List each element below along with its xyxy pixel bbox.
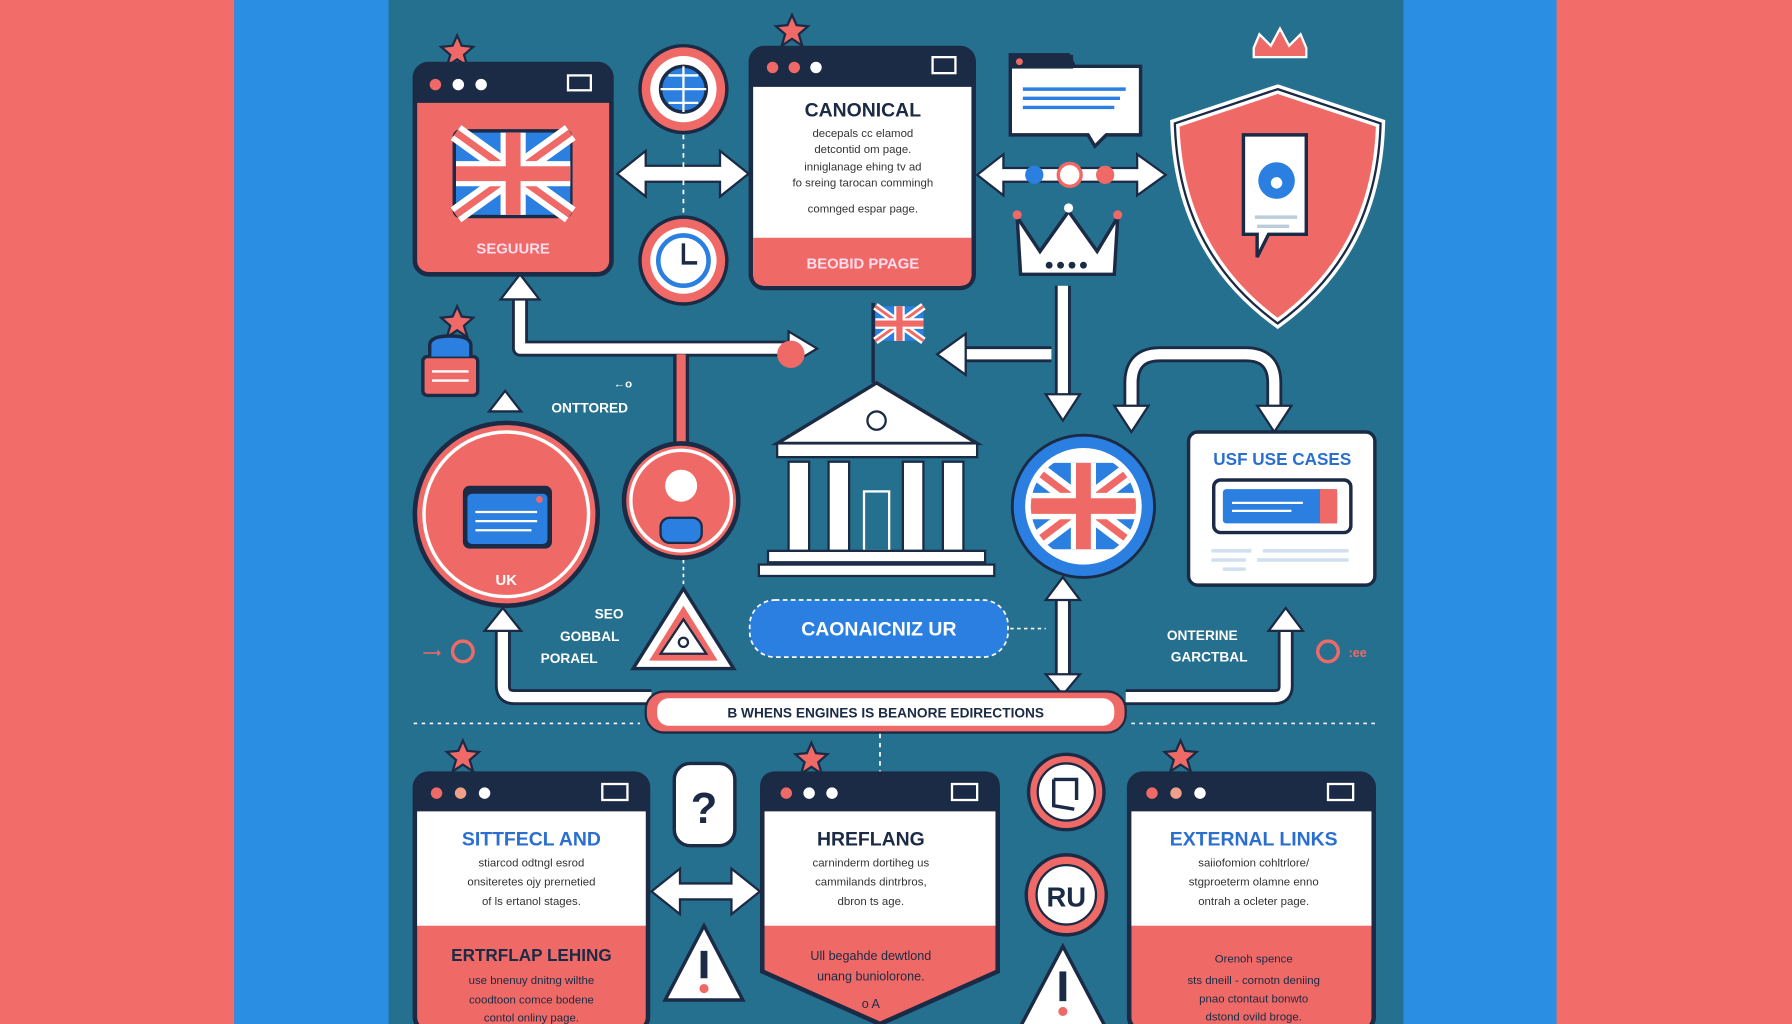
bottom window 3 external links: ontrah a ocleter page. <box>1198 896 1309 908</box>
window: canonical: BEOBID PPAGE <box>806 257 919 273</box>
window: seguure: SEGUURE <box>476 242 550 258</box>
bottom window 1: SITTFECL AND <box>462 829 601 851</box>
bottom window 2 hreflang: cammilands dintrbros, <box>815 877 927 889</box>
flag on pole <box>873 303 923 383</box>
window: canonical: CANONICAL <box>805 100 921 122</box>
side markers: ⟶ <box>423 646 442 660</box>
bottom window 3 external links: pnao ctontaut bonwto <box>1199 993 1308 1005</box>
circle person <box>624 443 738 558</box>
label: onttored: ONTTORED <box>551 401 628 416</box>
bottom window 3 external links: stgproeterm olamne enno <box>1189 877 1319 889</box>
warning bottom right <box>1019 946 1106 1024</box>
bottom window 1 <box>415 741 648 1024</box>
question box: ? <box>691 785 717 833</box>
window: canonical: inniglanage ehing tv ad <box>804 161 922 173</box>
circle icon RU <box>1026 855 1106 935</box>
window: canonical: comnged espar page. <box>808 204 918 216</box>
card USF use cases: USF USE CASES <box>1213 449 1351 469</box>
bottom window 1: of ls ertanol stages. <box>482 896 581 908</box>
bottom window 2 hreflang: carninderm dortiheg us <box>813 857 929 869</box>
bottom window 1: ERTRFLAP LEHING <box>451 945 612 965</box>
bottom window 3 external links: EXTERNAL LINKS <box>1170 829 1338 851</box>
icon: globe <box>640 46 727 133</box>
bottom window 2 hreflang: Ull begahde dewtlond <box>810 949 931 963</box>
bottom window 2 hreflang: o A <box>862 997 881 1011</box>
bottom window 3 external links: Orenoh spence <box>1215 953 1293 965</box>
bottom window 1: use bnenuy dnitng wilthe <box>469 975 594 987</box>
circle blue UK <box>1013 435 1154 577</box>
question box <box>674 763 735 846</box>
double arrows <box>617 151 1166 914</box>
side text: SEO <box>595 606 624 621</box>
warning triangle mid <box>633 589 734 669</box>
window: canonical: decepals cc elamod <box>812 128 913 140</box>
bottom window 3 external links: sts dneill - cornotn deniing <box>1187 975 1320 987</box>
text: ←o <box>614 378 632 390</box>
bottom window 2 hreflang: HREFLANG <box>817 829 925 851</box>
bottom window 1: stiarcod odtngl esrod <box>478 857 584 869</box>
building <box>759 383 994 576</box>
bottom window 3 external links <box>1129 741 1374 1024</box>
banner <box>646 691 1126 733</box>
bottom window 3 external links: dstond ovild broge. <box>1206 1012 1302 1024</box>
shield <box>1175 89 1381 323</box>
circle UK: UK <box>496 573 517 589</box>
side text: GOBBAL <box>560 629 619 644</box>
bottom window 1: coodtoon comce bodene <box>469 994 594 1006</box>
side text: PORAEL <box>541 651 598 666</box>
banner: B WHENS ENGINES IS BEANORE EDIRECTIONS <box>727 706 1044 721</box>
window: seguure <box>415 35 611 274</box>
warning bottom left <box>665 926 743 1000</box>
side text: ONTERINE <box>1167 628 1238 643</box>
bottom window 2 hreflang: unang buniolorone. <box>817 970 925 984</box>
side markers <box>423 641 1367 662</box>
bottom window 2 hreflang: dbron ts age. <box>838 896 904 908</box>
pill canonicalize URL: CAONAICNIZ UR <box>801 618 956 640</box>
crown icon <box>1013 203 1122 274</box>
window: canonical: detcontid om page. <box>814 144 911 156</box>
bottom window 2 hreflang <box>762 743 998 1024</box>
bottom window 3 external links: saiiofomion cohltrlore/ <box>1198 857 1310 869</box>
side markers: :ee <box>1349 646 1367 660</box>
window: canonical <box>751 15 974 288</box>
chat bubble <box>1010 55 1141 146</box>
bottom window 1: onsiteretes ojy prernetied <box>467 877 595 889</box>
circle icon top right <box>1029 754 1104 830</box>
pill canonicalize URL <box>750 600 1008 657</box>
window: canonical: fo sreing tarocan commingh <box>792 177 933 189</box>
circle icon RU: RU <box>1046 881 1086 912</box>
card USF use cases <box>1189 432 1375 585</box>
crown small <box>1254 29 1306 57</box>
lock icon <box>423 306 478 395</box>
circle UK <box>415 423 598 606</box>
icon: clock <box>640 217 727 304</box>
side text: GARCTBAL <box>1171 650 1248 665</box>
side text <box>541 606 1248 666</box>
connector arrows <box>503 286 1286 697</box>
